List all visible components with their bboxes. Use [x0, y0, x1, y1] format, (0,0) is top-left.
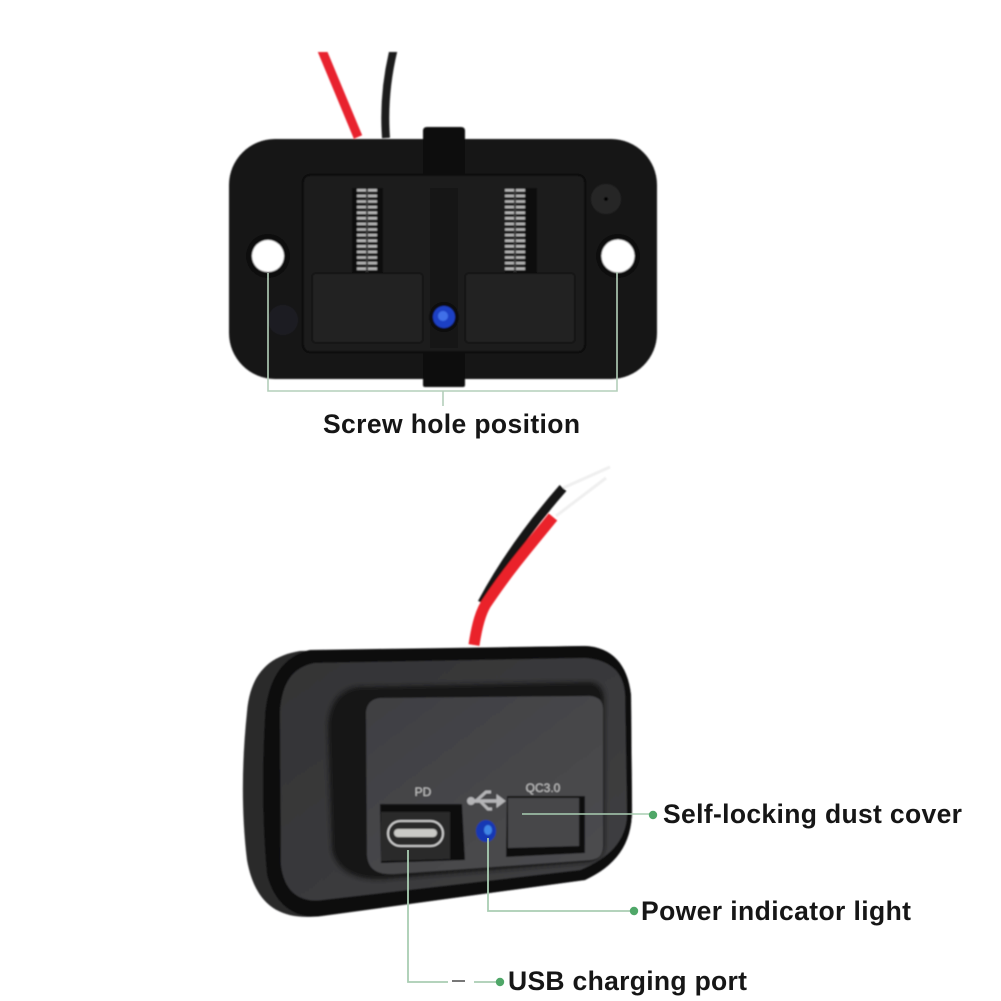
- centre channel: [430, 188, 458, 348]
- socket face: [366, 696, 603, 874]
- raised socket shadow: [328, 682, 604, 879]
- bottom clip: [423, 350, 465, 387]
- right post: [591, 184, 621, 214]
- QC3.0 label: QC3.0: [526, 781, 561, 795]
- panel: front view of socket: [243, 467, 632, 917]
- screw hole bracket lines: [268, 272, 617, 406]
- PD label: PD: [415, 785, 432, 799]
- USB-C connector: [388, 821, 443, 846]
- panel: rear view of socket: [229, 48, 657, 387]
- black wire rear: [385, 48, 394, 138]
- left post: [268, 305, 298, 335]
- QC3.0 dust cover: [506, 796, 585, 857]
- outer front plate: [243, 646, 632, 917]
- red wire rear: [321, 48, 358, 137]
- plate surface: [280, 658, 627, 900]
- right cover: [465, 273, 575, 343]
- label: screw hole position: Screw hole position: [323, 409, 580, 439]
- right spring: [505, 188, 537, 273]
- USB symbol: [468, 792, 505, 809]
- indicator LED front: [476, 820, 496, 842]
- indicator LED rear: [429, 302, 459, 332]
- label: USB charging port: USB charging port: [508, 966, 747, 996]
- right screw hole: [596, 234, 640, 278]
- leader: USB charging port: [408, 850, 504, 986]
- black wire front: [482, 488, 563, 603]
- top clip: [423, 127, 465, 178]
- label: power indicator light: Power indicator light: [641, 896, 911, 926]
- left screw hole: [246, 234, 290, 278]
- label: self-locking dust cover: Self-locking dust cover: [663, 799, 962, 829]
- PD port: [380, 804, 465, 863]
- leader: power indicator light: [488, 838, 638, 915]
- leader: self-locking dust cover: [522, 811, 657, 819]
- left cover: [312, 273, 423, 343]
- inner frame: [303, 175, 585, 352]
- rear mounting plate: [229, 139, 657, 379]
- black rim: [263, 646, 632, 917]
- stripped wire strands: [556, 467, 610, 516]
- red wire front: [474, 517, 553, 645]
- left spring: [352, 188, 383, 273]
